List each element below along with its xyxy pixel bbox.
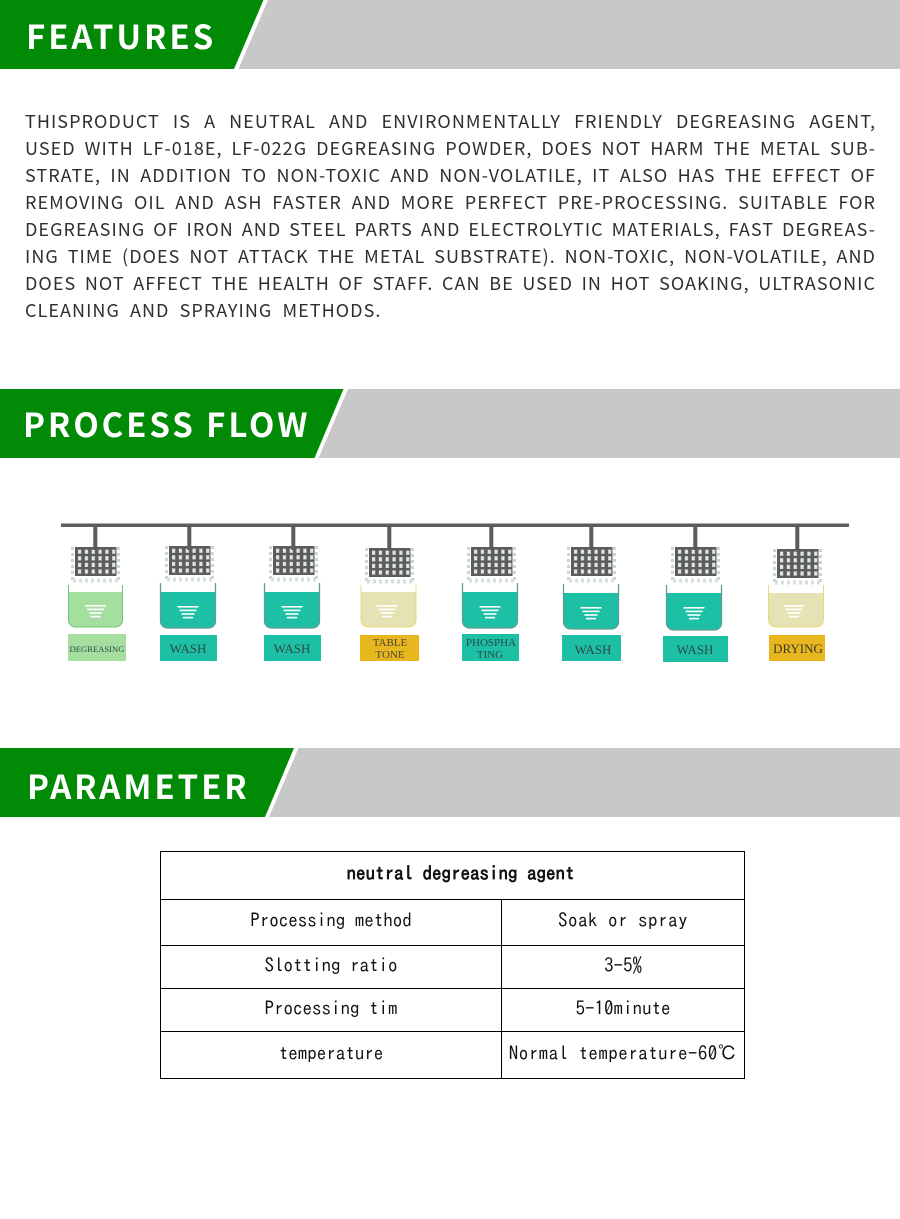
station: table tone: TABLE — [373, 637, 408, 649]
features text block: CLEANING AND SPRAYING METHODS. — [25, 297, 381, 323]
parameter table — [160, 851, 745, 1079]
station: wash 2: WASH — [274, 641, 310, 656]
parameter table: temperature — [279, 1044, 383, 1062]
station: wash 4 — [663, 526, 728, 662]
features text block: DEGREASING OF IRON AND STEEL PARTS AND ELECTROLYTIC MATERIALS, FAST DEGREAS- — [25, 216, 876, 242]
header band: features — [0, 0, 900, 69]
overhead rail — [61, 524, 849, 527]
station: wash 3: WASH — [575, 642, 611, 657]
features text block: USED WITH LF-018E, LF-022G DEGREASING POWDER, DOES NOT HARM THE METAL SUB- — [25, 135, 876, 161]
station: wash 1 — [160, 526, 217, 661]
station: wash 2 — [264, 526, 321, 661]
parameter table: 3-5% — [604, 956, 642, 974]
features text block: THISPRODUCT IS A NEUTRAL AND ENVIRONMENTALLY FRIENDLY DEGREASING AGENT, — [25, 108, 876, 134]
parameter table: Normal temperature-60℃ — [509, 1044, 737, 1062]
parameter table: Slotting ratio — [264, 956, 398, 974]
station: wash 4: WASH — [677, 642, 713, 657]
station: drying: DRYING — [773, 641, 823, 656]
station: degreasing — [68, 526, 126, 661]
station: wash 1: WASH — [170, 641, 206, 656]
parameter table: Soak or spray — [558, 911, 688, 930]
parameter table: Processing tim — [264, 998, 398, 1018]
process flow diagram — [61, 524, 849, 662]
header band: parameter — [0, 748, 900, 817]
header band: features: FEATURES — [26, 11, 216, 59]
features text block: DOES NOT AFFECT THE HEALTH OF STAFF. CAN BE USED IN HOT SOAKING, ULTRASONIC — [25, 270, 876, 296]
parameter table: 5-10minute — [576, 998, 670, 1018]
station: phosphating: PHOSPHA — [466, 637, 516, 649]
station: wash 3 — [562, 526, 621, 661]
station: table tone: TONE — [375, 649, 405, 661]
station: drying — [768, 526, 825, 661]
header band: parameter: PARAMETER — [27, 761, 250, 809]
header band: process flow: PROCESS FLOW — [23, 399, 310, 447]
features text block — [25, 108, 876, 323]
parameter table: neutral degreasing agent — [346, 864, 574, 883]
header band: process flow — [0, 389, 900, 458]
features text block: STRATE, IN ADDITION TO NON-TOXIC AND NON-VOLATILE, IT ALSO HAS THE EFFECT OF — [25, 162, 876, 188]
station: table tone — [360, 526, 419, 661]
station: phosphating — [462, 526, 519, 661]
station: phosphating: TING — [477, 649, 503, 661]
features text block: REMOVING OIL AND ASH FASTER AND MORE PERFECT PRE-PROCESSING. SUITABLE FOR — [25, 189, 876, 215]
parameter table: Processing method — [250, 911, 412, 930]
station: degreasing: DEGREASING — [70, 644, 124, 654]
features text block: ING TIME (DOES NOT ATTACK THE METAL SUBSTRATE). NON-TOXIC, NON-VOLATILE, AND — [25, 243, 876, 269]
